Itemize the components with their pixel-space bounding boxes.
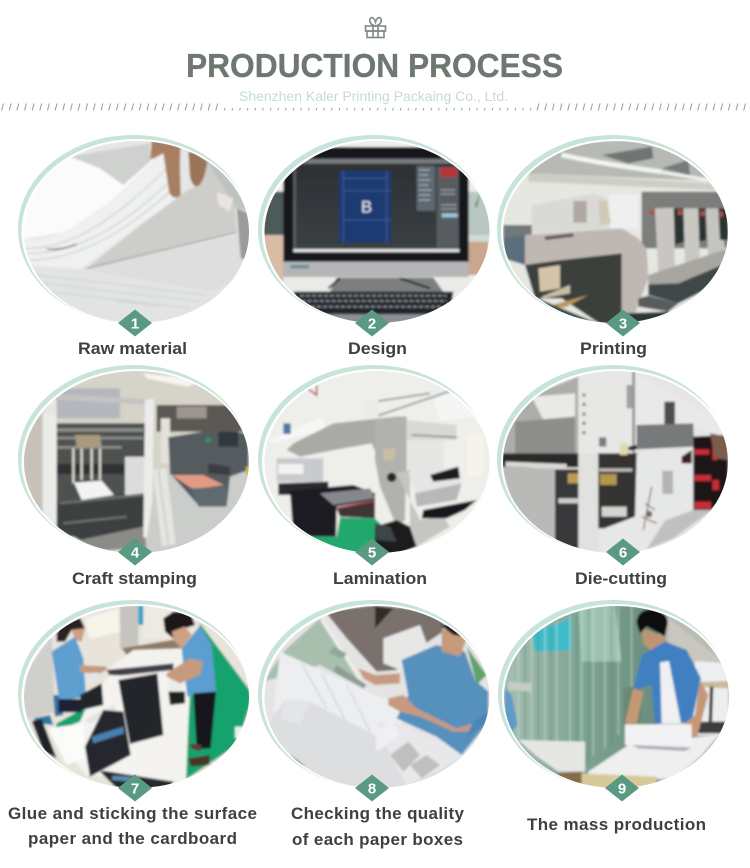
badge 3 bbox=[606, 310, 640, 336]
label 9: The mass production bbox=[527, 815, 706, 834]
label 4: Craft stamping bbox=[72, 569, 197, 588]
photo: worker checking boxes bbox=[260, 602, 493, 792]
photo: printing press bbox=[503, 141, 728, 323]
ring 2 bbox=[258, 135, 491, 324]
badge 5 bbox=[355, 538, 389, 566]
label 1: Raw material bbox=[78, 339, 187, 358]
badge 3: 3 bbox=[619, 316, 627, 332]
ring 9 bbox=[498, 600, 731, 789]
badge 8: 8 bbox=[368, 780, 376, 798]
panel 2: design bbox=[258, 135, 493, 358]
panel 1: raw material bbox=[18, 135, 253, 358]
ring 8 bbox=[258, 600, 491, 789]
panel 4: craft stamping bbox=[18, 365, 253, 588]
title: PRODUCTION PROCESS bbox=[186, 47, 563, 84]
panel 7: glue and sticking bbox=[8, 600, 257, 848]
label 8: Checking the quality bbox=[291, 804, 465, 823]
label 3: Printing bbox=[580, 339, 647, 358]
label 5: Lamination bbox=[333, 569, 427, 588]
label 8 bbox=[291, 804, 465, 849]
badge 6 bbox=[606, 538, 640, 566]
photo: worker with curtain bbox=[498, 602, 735, 792]
label 7: Glue and sticking the surface bbox=[8, 804, 257, 823]
header bbox=[0, 18, 750, 111]
panel 9: mass production bbox=[498, 600, 735, 834]
panel 3: printing bbox=[497, 135, 735, 358]
photo: workers gluing bbox=[20, 602, 253, 792]
ring 7 bbox=[18, 600, 250, 789]
badge 9: 9 bbox=[618, 780, 626, 798]
subtitle: Shenzhen Kaler Printing Packaing Co., Ltd. bbox=[239, 89, 508, 104]
label 8: of each paper boxes bbox=[292, 830, 463, 849]
label 7: paper and the cardboard bbox=[28, 829, 237, 848]
ring 6 bbox=[497, 365, 730, 554]
icon: gift box bbox=[366, 18, 386, 38]
photo: computer monitor bbox=[260, 138, 493, 328]
panel 6: die-cutting bbox=[497, 365, 735, 588]
badge 7 bbox=[118, 774, 152, 802]
badge 4: 4 bbox=[131, 544, 140, 562]
dashed divider bbox=[0, 103, 750, 111]
ring 3 bbox=[497, 135, 730, 324]
badge 9 bbox=[605, 774, 639, 802]
photo: die-cutting machine bbox=[503, 371, 728, 552]
label 2: Design bbox=[348, 339, 407, 358]
photo: lamination machine bbox=[260, 367, 493, 557]
ring 4 bbox=[18, 365, 250, 554]
ring 5 bbox=[258, 365, 491, 554]
badge 7: 7 bbox=[131, 780, 139, 798]
label 6: Die-cutting bbox=[575, 569, 667, 588]
badge 6: 6 bbox=[619, 544, 627, 562]
label 7 bbox=[8, 804, 257, 848]
badge 2: 2 bbox=[368, 316, 376, 332]
photo: paper stack bbox=[20, 138, 253, 328]
photo: stamping machine bbox=[20, 367, 253, 557]
ring 1 bbox=[18, 135, 250, 324]
panel 5: lamination bbox=[258, 365, 493, 588]
badge 5: 5 bbox=[368, 544, 376, 562]
badge 1 bbox=[118, 310, 152, 336]
badge 2 bbox=[355, 310, 389, 336]
badge 8 bbox=[355, 774, 389, 802]
photo: computer monitor: B bbox=[361, 197, 372, 216]
panel 8: checking quality bbox=[258, 600, 493, 849]
badge 4 bbox=[118, 538, 152, 566]
badge 1: 1 bbox=[131, 316, 139, 332]
